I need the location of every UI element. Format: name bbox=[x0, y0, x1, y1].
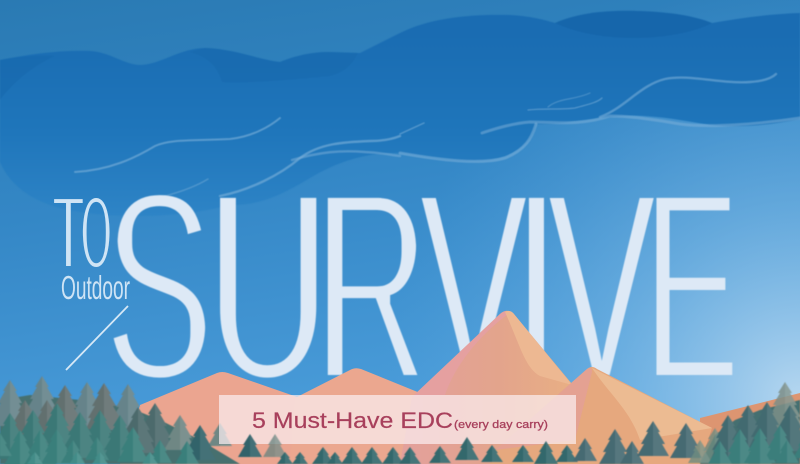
main title: SURVIVE bbox=[105, 135, 738, 437]
banner: (every day carry) bbox=[454, 419, 548, 431]
small title: TO: O bbox=[81, 174, 111, 290]
main title: SURVIVE: U bbox=[207, 135, 329, 436]
banner: 5 Must-Have EDC bbox=[252, 408, 453, 433]
mountain: right peak bbox=[490, 367, 712, 464]
forest: left group bbox=[0, 376, 240, 464]
mountain: left peak bbox=[120, 372, 300, 464]
mountain: tall peak bbox=[400, 311, 580, 464]
small title: TO: T bbox=[53, 177, 84, 291]
cloud wisps bbox=[75, 74, 800, 196]
far right ridge bbox=[700, 393, 800, 464]
mountains bbox=[120, 311, 800, 464]
small title: TO bbox=[53, 174, 111, 291]
subtitle: Outdoor: Outdoor bbox=[61, 269, 130, 306]
main title: SURVIVE: I bbox=[514, 136, 559, 437]
main title: SURVIVE: E bbox=[645, 137, 738, 437]
slash line bbox=[66, 306, 128, 370]
main title: SURVIVE: S bbox=[105, 136, 213, 437]
main title: SURVIVE: V bbox=[419, 136, 528, 437]
main title: SURVIVE: R bbox=[315, 136, 428, 436]
clouds bbox=[0, 11, 800, 216]
banner bbox=[219, 395, 576, 444]
mountain: middle peak bbox=[290, 368, 425, 464]
forest: front and right group bbox=[238, 382, 800, 464]
main title: SURVIVE: V bbox=[547, 136, 656, 437]
